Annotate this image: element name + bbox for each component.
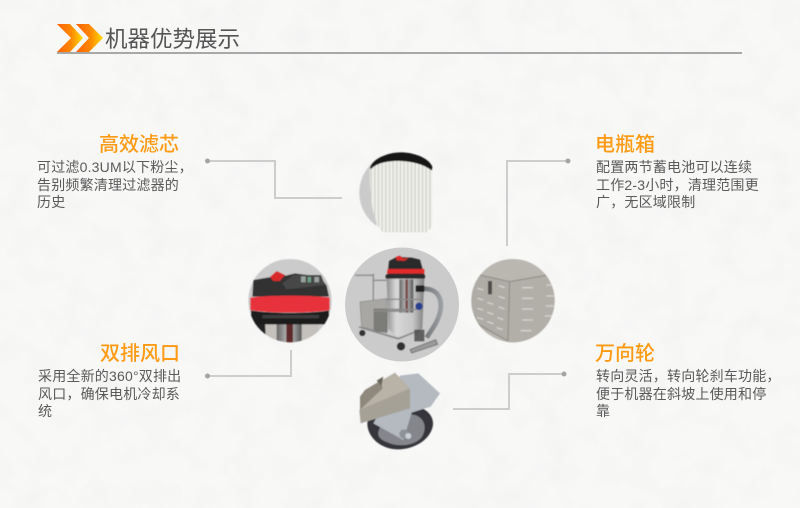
motor tank — [387, 279, 424, 338]
cart frame — [359, 311, 415, 339]
photo: vacuum machine in centre circle — [345, 248, 459, 362]
connector: air outlet — [205, 350, 291, 378]
illustration layer: header graphics, connectors and product photos — [57, 24, 742, 450]
body text: 便于机器在斜坡上使用和停 — [596, 386, 766, 402]
connector: battery box — [507, 158, 570, 246]
heading: 电瓶箱: 电瓶箱 — [595, 134, 655, 156]
body text: 配置两节蓄电池可以连续 — [596, 159, 752, 175]
body text: 转向灵活，转向轮刹车功能， — [596, 368, 781, 384]
heading: 高效滤芯: 高效滤芯 — [99, 134, 179, 156]
heading: 万向轮: 万向轮 — [595, 343, 655, 365]
photo: swivel caster with brake — [359, 373, 440, 449]
body text — [38, 368, 181, 419]
icon: double orange chevrons — [57, 24, 103, 52]
photo: pleated filter — [359, 152, 441, 233]
page title: 机器优势展示 — [105, 27, 240, 52]
body text: 工作2-3小时，清理范围更 — [596, 177, 759, 193]
body text: 采用全新的360°双排出 — [38, 368, 181, 384]
brand badge — [415, 303, 423, 310]
squeegee — [410, 340, 438, 353]
body text — [596, 368, 781, 419]
body text: 告别频繁清理过滤器的 — [37, 177, 179, 193]
body text: 可过滤0.3UM以下粉尘， — [37, 159, 193, 175]
header underline — [57, 52, 742, 54]
body text: 风口，确保电机冷却系 — [38, 386, 180, 402]
photo: lid and air outlet close-up — [248, 258, 332, 344]
battery tray — [360, 299, 387, 333]
text block: battery box — [595, 134, 759, 210]
body text: 靠 — [596, 403, 610, 419]
body text: 广，无区域限制 — [596, 194, 695, 210]
body text — [596, 159, 759, 210]
text block: swivel wheel — [595, 342, 781, 419]
heading: 双排风口: 双排风口 — [100, 343, 180, 365]
body text: 历史 — [37, 194, 65, 210]
photo: stainless battery box — [470, 258, 556, 343]
vacuum hose — [423, 289, 441, 338]
body text: 统 — [38, 403, 52, 419]
tank lid — [388, 257, 424, 275]
body text — [37, 159, 193, 210]
text block: high-efficiency filter — [37, 134, 193, 210]
connector: swivel wheel — [453, 372, 566, 409]
wheels — [359, 330, 365, 336]
text block: dual air outlet — [38, 343, 181, 419]
connector: filter — [205, 158, 342, 198]
cart handle — [355, 274, 387, 304]
